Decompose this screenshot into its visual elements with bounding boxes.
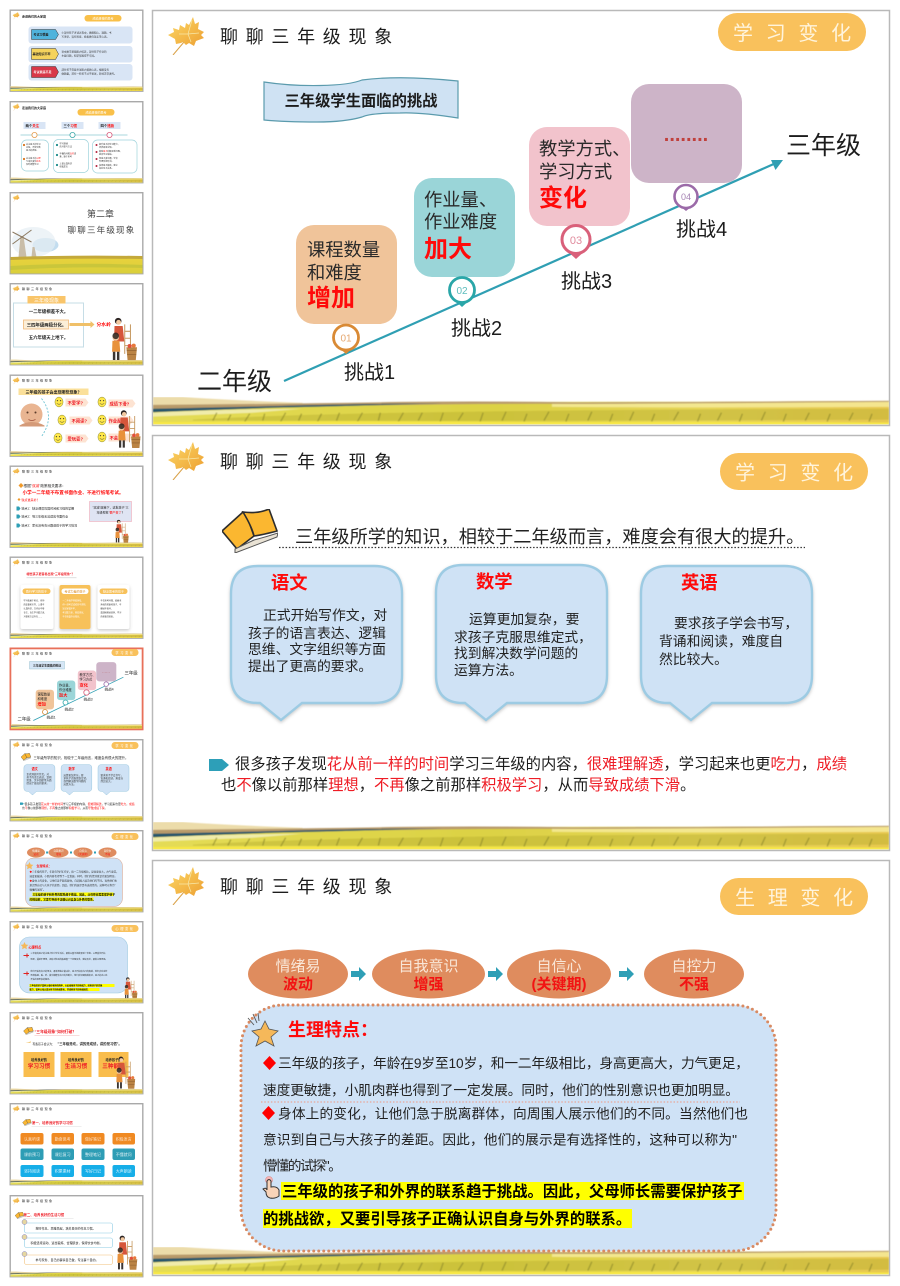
thumbnail 7: 哪些孩子容易出现三年级现象: 缺乏思考的孩子 [103, 588, 124, 594]
callout: 语文: 孩子的语言表达、逻辑 [248, 626, 386, 641]
thumbnail 9: 三年级所学的知识: 很多孩子发现花从前一样的时间学习三年级的内容，很难理解透，学习起来也更吃力，成绩 [24, 802, 135, 806]
thumbnail 10: 生理变化: 三年级的孩子和外界的联系趋于挑战。因此，父母师长需要保护孩子 [32, 892, 115, 896]
icon: pin 01 [334, 325, 358, 354]
thumbnail 12: 三年级现象如何打破: "三年级现象"如何打破？ [34, 1029, 76, 1034]
thumbnail 10: 生理变化: 自控力 [104, 848, 112, 852]
card: challenge 3: 变化 [539, 184, 587, 212]
thumbnail 1: 走进我们的大家庭: 考试习惯差 [34, 32, 49, 36]
thumbnail 2: 两个关注 三个习惯 四个措施: 教，勤于思考 [60, 154, 72, 158]
thumbnail 13: 第一 培养良好的学习习惯: 勤奋思考 [55, 1136, 71, 1142]
badge: 生理变化 [720, 878, 868, 915]
thumbnail 10: 生理变化: 自信心 [79, 848, 87, 852]
oval: 自我意识增强 [372, 950, 485, 998]
thumbnail 7: 哪些孩子容易出现三年级现象: 的积极性较差。 [100, 614, 115, 618]
arrow [619, 967, 634, 981]
thumbnail 11: 心理特点 [10, 922, 143, 1003]
thumbnail 9: 三年级所学的知识: 数学 [68, 766, 76, 771]
thumbnail 2: 两个关注 三个习惯 四个措施: 良好亲子关系。 [99, 166, 114, 170]
callout: 英语 [641, 566, 812, 720]
thumbnail 8: active slide 三年级学生面临的挑战: 挑战4 [104, 686, 114, 692]
oval: 自控力不强: 不强 [679, 976, 709, 993]
thumbnail 6: 双减政策: 缺点谁来补？ [22, 497, 40, 502]
thumbnail 13: 第一 培养良好的学习习惯: 积极发言 [116, 1136, 132, 1142]
thumbnail 4: 三年级现象: 聊聊三年级现象 [22, 286, 53, 291]
thumbnail 9: 三年级所学的知识: 三年级所学的知识，相较于二年级而言，难度会有很大的提升。 [34, 755, 128, 760]
thumbnail 13: 第一 培养良好的学习习惯: 积累素材 [55, 1168, 71, 1174]
thumbnail 10: 生理变化: 不强 [105, 852, 110, 856]
card: challenge 2: 作业难度 [424, 211, 497, 232]
thumbnail 13: 第一 培养良好的学习习惯: 认真听课 [24, 1136, 40, 1142]
text block: body characteristics: 速度更敏捷，小肌肉群也得到了一定发展。同时，他们的性别意识也更加明显。 [263, 1082, 739, 1098]
thumbnail 9: 三年级所学的知识: 背诵和阅读，难度自 [100, 776, 124, 780]
thumbnail 1: 走进我们的大家庭: 主要问题，知识掌握得不牢固。 [62, 54, 97, 58]
thumbnail 8: active slide 三年级学生面临的挑战: 三年级学生面临的挑战 [33, 664, 61, 668]
icon: maple leaf [168, 442, 204, 480]
thumbnail 2: 两个关注 三个习惯 四个措施: 上课认真听讲 [60, 162, 72, 166]
thumbnail 9: 三年级所学的知识: 运算方法。 [64, 782, 76, 786]
thumbnail 6: 双减政策: 缺点1：缺乏课后巩固时间和习得的掌握 [22, 506, 74, 511]
thumbnail 8: active slide 三年级学生面临的挑战: 作业难度 [59, 687, 73, 692]
thumbnail 1: 走进我们的大家庭: 部分孩子需要考试能力兼顾心态，根据没有 [62, 68, 110, 72]
thumbnail 2: 两个关注 三个习惯 四个措施: 两个关注 [26, 123, 40, 128]
thumbnail 10: 生理变化 [10, 831, 143, 912]
thumbnail 6: 双减政策: 缺点3：家长没有充分跟进孩子的学习情况 [22, 523, 77, 528]
thumbnail 8: active slide 三年级学生面临的挑战: 挑战2 [64, 706, 74, 712]
thumbnail 5: 三年级的孩子会出现哪些现象: 不阅读? [72, 418, 87, 424]
thumbnail 8: active slide 三年级学生面临的挑战: 教学方式、 [80, 672, 95, 677]
card: challenge 1: 课程数量 [307, 239, 380, 260]
icon: open book [222, 509, 278, 553]
thumbnail 11: 心理特点: 三年级的孩子的注意力和小学生活后，逐渐从童年期发展到少年期。心理变化开始 [30, 951, 105, 955]
thumbnail 9: 三年级所学的知识: 找到解决数学问题的 [64, 779, 87, 783]
thumbnail 4: 三年级现象: 三年级现象 [34, 297, 59, 304]
card: challenge 1 [296, 225, 397, 324]
label: 挑战1: 挑战1 [344, 361, 395, 384]
thumbnail 6: 双减政策: 缺点2：到三年级无法适应书面作业 [22, 514, 68, 519]
icon: pin 03: 03 [570, 235, 582, 247]
thumbnail 7: 哪些孩子容易出现三年级现象: 一二年级学得很轻松， [62, 598, 83, 602]
thumbnail 11: 心理特点: 聊聊三年级现象 [22, 924, 53, 929]
thumbnail 2: 两个关注 三个习惯 四个措施: 过程，不仅分数 [26, 145, 41, 149]
thumbnail 2: 两个关注 三个习惯 四个措施: 走进我们的大家庭 [22, 105, 46, 110]
label: 挑战4: 挑战4 [676, 218, 727, 241]
thumbnail 7: 哪些孩子容易出现三年级现象 [10, 557, 143, 638]
thumbnail 6: 双减政策 [10, 466, 143, 547]
thumbnail 2: 两个关注 三个习惯 四个措施: 的习惯与方法 [60, 144, 72, 148]
banner: 三年级学生面临的挑战: 三年级学生面临的挑战 [285, 92, 438, 110]
thumbnail 3: 第二章 聊聊三年级现象: 聊聊三年级现象 [68, 225, 135, 235]
card: challenge 3 [529, 127, 630, 226]
thumbnail 7: 哪些孩子容易出现三年级现象: 聊聊三年级现象 [22, 559, 53, 564]
oval: 自我意识增强: 增强 [413, 975, 444, 993]
thumbnail 2: 两个关注 三个习惯 四个措施: 关注孩子的学习 [26, 142, 41, 146]
label: 三年级: 三年级 [786, 132, 861, 160]
callout: 数学 [436, 565, 607, 720]
icon: maple leaf [168, 17, 204, 55]
thumbnail 7: 哪些孩子容易出现三年级现象: 不会检查作业题目。 [62, 614, 81, 618]
icon: pin 02: 02 [456, 286, 468, 297]
thumbnail 9: 三年级所学的知识: 要求孩子学会书写， [100, 773, 123, 777]
thumbnail 10: 生理变化: 懵懂的试探"。 [30, 888, 45, 892]
thumbnail 14: 第二 培养良好的生活习惯: 第二、培养良好的生活习惯 [24, 1212, 65, 1217]
card: challenge 4 [631, 84, 742, 183]
oval: 自控力不强: 自控力 [671, 958, 717, 975]
thumbnail 13: 第一 培养良好的学习习惯: 做好笔记 [85, 1136, 101, 1142]
card: challenge 2: 作业量、 [424, 189, 497, 210]
thumbnail 9: 三年级所学的知识: 语文 [32, 766, 39, 771]
thumbnail 14: 第二 培养良好的生活习惯: 聊聊三年级现象 [22, 1198, 53, 1203]
thumbnail 11: 心理特点: 能力，需要父母认真对孩子的情绪变化，并培养孩子的情绪调控。 [30, 987, 90, 991]
thumbnail 13: 第一 培养良好的学习习惯: 写好日记 [85, 1168, 101, 1174]
thumbnail 14: 第二 培养良好的生活习惯: 积极坚持运动、适当锻炼、合理膳食，保持饮食均衡。 [30, 1240, 103, 1245]
icon: pin 02 [450, 278, 474, 307]
thumbnail 14: 第二 培养良好的生活习惯: 参与家务、自己的事情自己做，专注事个目的。 [36, 1257, 99, 1262]
oval: 情绪易波动: 波动 [283, 975, 313, 993]
thumbnail 8: active slide 三年级学生面临的挑战 [10, 648, 143, 729]
thumbnail 2: 两个关注 三个习惯 四个措施: 不懂的问题 及时 请 [60, 152, 76, 156]
thumbnail 6: 双减政策: 小学一二年级不布置书面作业、不进行纸笔考试。 [22, 489, 124, 496]
thumbnail 1: 走进我们的大家庭: 考试素质不足 [34, 69, 52, 74]
text block: body characteristics: 三年级的孩子，年龄在9岁至10岁，和一二年级相比，身高更高大，力气更足， [278, 1055, 749, 1071]
thumbnail 2: 两个关注 三个习惯 四个措施: 和孩子多沟通，学会 [99, 156, 118, 160]
callout: 数学: 求孩子克服思维定式， [454, 630, 592, 645]
thumbnail 8: active slide 三年级学生面临的挑战: 挑战3 [84, 696, 93, 702]
thumbnail 6: 双减政策: "双减"政策下，这批孩子"三 [92, 504, 129, 510]
icon: maple leaf [168, 867, 204, 905]
card: challenge 2: 加大 [424, 236, 472, 263]
thumbnail 8: active slide 三年级学生面临的挑战: 二年级 [18, 716, 31, 722]
thumbnail 2: 两个关注 三个习惯 四个措施: 合理安排时间。 [99, 159, 114, 163]
thumbnail 12: 三年级现象如何打破: 三种能力 [102, 1062, 125, 1070]
oval: 自我意识增强: 自我意识 [398, 957, 459, 975]
thumbnail 10: 生理变化: 增强 [56, 852, 61, 856]
thumbnail 2: 两个关注 三个习惯 四个措施: 成绩滑坡的思考 [85, 110, 107, 114]
icon: star [248, 1013, 278, 1046]
thumbnail 11: 心理特点: 他们开始有自己的想法，逐渐想独立做决定，孩子开始有自己的情绪，他们会对这些 [30, 969, 107, 973]
thumbnail 8: active slide 三年级学生面临的挑战: 学习变化 [115, 650, 135, 655]
thumbnail 13: 第一 培养良好的学习习惯: 聊聊三年级现象 [22, 1106, 53, 1111]
thumbnail 8: active slide 三年级学生面临的挑战: …… [102, 668, 110, 674]
arrow: progress line from 二年级 to 三年级 [284, 160, 783, 381]
thumbnail 8: active slide 三年级学生面临的挑战: 加大 [59, 692, 68, 698]
panel: slide 3 生理变化 [152, 860, 890, 1276]
thumbnail 4: 三年级现象: 五六年级天上地下。 [29, 334, 68, 341]
thumbnail 5: 三年级的孩子会出现哪些现象: 聊聊三年级现象 [22, 377, 53, 382]
thumbnail 13: 第一 培养良好的学习习惯: 课前预习 [24, 1151, 40, 1157]
thumbnail 2: 两个关注 三个习惯 四个措施: 提高学习成绩。 [99, 152, 114, 156]
callout: 英语: 背诵和阅读，难度自 [659, 634, 783, 649]
thumbnail 12: 三年级现象如何打破: 有些孩子会认为： [32, 1042, 55, 1046]
thumbnail 12: 三年级现象如何打破 [10, 1013, 143, 1094]
thumbnail 5: 三年级的孩子会出现哪些现象: 三年级的孩子会出现哪些现象？ [26, 388, 82, 394]
thumbnail 5: 三年级的孩子会出现哪些现象: 爱玩耍? [68, 436, 83, 442]
thumbnail 7: 哪些孩子容易出现三年级现象: 哪些孩子更容易出现"三年级现象"？ [26, 571, 74, 576]
thumbnail 12: 三年级现象如何打破: 培养孩子的 [106, 1057, 121, 1062]
thumbnail 2: 两个关注 三个习惯 四个措施: 提升孩子的学习能力， [99, 142, 120, 146]
thumbnail 7: 哪些孩子容易出现三年级现象: 教行学习的孩子 [26, 588, 47, 594]
thumbnail 6: 双减政策: 年级现象"要产变了？ [96, 510, 125, 514]
thumbnail 10: 生理变化: ◆身体上的变化，让他们急于脱离群体，向周围人展示他们的不同。当然他们也 [30, 878, 118, 882]
badge: 学习变化: 学习变化 [733, 22, 864, 45]
label: 挑战2: 挑战2 [451, 317, 502, 340]
thumbnail 2: 两个关注 三个习惯 四个措施: 关注孩子的 心理 [26, 156, 41, 160]
thumbnail 13: 第一 培养良好的学习习惯: 整理笔记 [85, 1151, 101, 1157]
thumbnail 9: 三年级所学的知识: 求孩子克服思维定式， [64, 776, 89, 780]
thumbnail 13: 第一 培养良好的学习习惯: 不懂就问 [116, 1151, 132, 1157]
thumbnail 8: active slide 三年级学生面临的挑战: 聊聊三年级现象 [22, 650, 53, 655]
thumbnail 4: 三年级现象: 三四年级两极分化。 [27, 322, 66, 328]
thumbnail 2: 两个关注 三个习惯 四个措施: 积极发言 [60, 164, 68, 168]
thumbnail 7: 哪些孩子容易出现三年级现象: 不会思考问题，依赖老 [100, 598, 121, 602]
callout: 数学: 找到解决数学问题的 [454, 646, 578, 661]
heading: 聊聊三年级现象: 聊聊三年级现象 [220, 27, 400, 47]
callout: 英语: 要求孩子学会书写， [674, 616, 798, 631]
thumbnail 1: 走进我们的大家庭: 成绩滑坡的思考 [92, 16, 114, 20]
callout: 语文 [231, 566, 402, 720]
thumbnail 9: 三年级所学的知识: 聊聊三年级现象 [22, 742, 53, 747]
icon: pointing hand [263, 1176, 279, 1198]
thumbnail 8: active slide 三年级学生面临的挑战: 变化 [80, 682, 89, 688]
thumbnail 10: 生理变化: 自我意识 [53, 848, 64, 852]
thumbnail 10: 生理变化: 生理变化 [115, 834, 135, 839]
thumbnail 1: 走进我们的大家庭: 写潦草、没有检查、抢着做完就走等心态。 [62, 34, 109, 38]
thumbnail 7: 哪些孩子容易出现三年级现象: 习惯和方法存在…… [24, 614, 42, 618]
thumbnail 2: 两个关注 三个习惯 四个措施: 多给孩子鼓励，建立 [99, 163, 118, 167]
callout: 数学: 数学 [476, 571, 513, 592]
thumbnail 10: 生理变化: ◆三年级的孩子，年龄在9岁至10岁，和一二年级相比，身高更高大，力气更足， [30, 870, 119, 874]
panel: slide 1 三年级学生面临的挑战 [152, 10, 890, 426]
thumbnail 1: 走进我们的大家庭: 小部分孩子考试过程中，做题粗心、漏题、书 [62, 30, 112, 34]
thumbnail 14: 第二 培养良好的生活习惯: 按时作息、早睡早起，培养良好的作息习惯。 [36, 1226, 96, 1230]
thumbnail 13: 第一 培养良好的学习习惯: 课后复习 [55, 1151, 71, 1157]
thumbnail 8: active slide 三年级学生面临的挑战: 课程数量 [38, 692, 51, 696]
thumbnail 5: 三年级的孩子会出现哪些现象 [10, 375, 143, 456]
text block: conclusion [221, 756, 847, 794]
text block: body characteristics [261, 1055, 749, 1174]
thumbnail 7: 哪些孩子容易出现三年级现象: 懂就不爱问， [100, 606, 113, 610]
thumbnail 9: 三年级所学的知识: 思维、文字组织等方面 [26, 778, 52, 782]
thumbnail 2: 两个关注 三个习惯 四个措施: 学习规律 [60, 142, 68, 146]
thumbnail 9: 三年级所学的知识: 运算更加复杂，要 [64, 773, 84, 777]
thumbnail 7: 哪些孩子容易出现三年级现象: 师给的答案和孩子，不 [100, 602, 121, 606]
thumbnail 12: 三年级现象如何打破: 培养良好的 [31, 1057, 47, 1062]
badge: 生理变化: 生理变化 [735, 886, 866, 910]
callout: 数学: 运算方法。 [454, 663, 523, 678]
text block: body characteristics: 懵懂的试探"。 [263, 1158, 342, 1174]
thumbnail 5: 三年级的孩子会出现哪些现象: 作业乱写? [108, 418, 129, 424]
thumbnail 2: 两个关注 三个习惯 四个措施: 鼓励 孩子 积极思考问题， [99, 149, 122, 153]
thumbnail 10: 生理变化: 生理特点： [36, 863, 52, 868]
thumbnail 12: 三年级现象如何打破: "三年级是坎，讲的是成绩，讲的是习惯"。 [58, 1041, 122, 1046]
decorative grass band [153, 822, 889, 850]
banner: 三年级学生面临的挑战 [264, 78, 458, 122]
thumbnail 6: 双减政策: 根据"双减"政策相关要求： [24, 483, 66, 488]
thumbnail 12: 三年级现象如何打破: 生活习惯 [65, 1062, 88, 1070]
thumbnail 3: 第二章 聊聊三年级现象: 第二章 [87, 208, 114, 219]
thumbnail 7: 哪些孩子容易出现三年级现象: 考试能力差，容易慌张， [62, 610, 85, 614]
oval: 自信心关键期: 自信心 [536, 958, 582, 975]
thumbnail 10: 生理变化: 波动 [33, 852, 39, 856]
icon: pin 04: 04 [681, 192, 691, 202]
text block: body characteristics: 身体上的变化，让他们急于脱离群体，向周围人展示他们的不同。当然他们也 [278, 1106, 748, 1122]
card: challenge 3: 教学方式、 [539, 138, 630, 159]
label: 二年级: 二年级 [197, 368, 272, 396]
oval: 自控力不强 [644, 950, 744, 998]
thumbnail 5: 三年级的孩子会出现哪些现象: 不会写? [110, 434, 125, 442]
icon: pin 01: 01 [340, 334, 352, 344]
thumbnail 10: 生理变化: 聊聊三年级现象 [22, 833, 53, 838]
badge: 学习变化: 学习变化 [735, 462, 866, 484]
thumbnail 2: 两个关注 三个习惯 四个措施: 与成长变化 状态 [26, 159, 41, 163]
thumbnail 7: 哪些孩子容易出现三年级现象: 知识掌握不牢， [62, 606, 77, 610]
thumbnail 4: 三年级现象 [10, 284, 143, 365]
thumbnail 12: 三年级现象如何打破: 培养良好的 [68, 1057, 84, 1062]
oval: 自信心关键期 [507, 950, 611, 998]
callout: 语文: 思维、文字组织等方面 [248, 641, 386, 657]
thumbnail 9: 三年级所学的知识: 正式开始写作文，对 [26, 772, 50, 776]
thumbnail 12: 三年级现象如何打破: 聊聊三年级现象 [22, 1015, 53, 1020]
thumbnail 7: 哪些孩子容易出现三年级现象: 遇到困难就放弃，学习 [100, 610, 121, 614]
text block: conclusion: 很多孩子发现花从前一样的时间学习三年级的内容，很难理解透，学习起来也更吃力，成绩 [235, 756, 847, 773]
badge: 学习变化 [718, 13, 866, 51]
thumbnail 11: 心理特点: 三年级的孩子需要父母和老师的陪伴，以此增强孩子的情绪力，培养孩子的抗挫 [30, 983, 103, 987]
callout: 英语: 英语 [681, 572, 718, 593]
card: challenge 4: ........ [664, 124, 708, 146]
thumbnail 1: 走进我们的大家庭: 基础知识不牢 [32, 51, 51, 56]
callout: 语文: 提出了更高的要求。 [248, 658, 372, 674]
decorative grass band [153, 397, 889, 424]
decorative grass band [153, 1247, 889, 1274]
thumbnail 11: 心理特点: 心理特点 [28, 944, 42, 950]
text block: conclusion: 也不像以前那样理想，不再像之前那样积极学习，从而导致成绩下滑。 [221, 777, 695, 794]
thumbnail 13: 第一 培养良好的学习习惯: 大声朗读 [116, 1168, 132, 1174]
thumbnail 8: active slide 三年级学生面临的挑战: 学习方式 [80, 676, 93, 682]
headline sentence: 三年级所学的知识，相较于二年级而言，难度会有很大的提升。 [295, 527, 804, 547]
callout: 英语: 然比较大。 [659, 651, 728, 667]
thumbnail 1: 走进我们的大家庭: 走进我们的大家庭 [22, 13, 46, 18]
thumbnail 8: active slide 三年级学生面临的挑战: 挑战1 [46, 714, 56, 720]
thumbnail 5: 三年级的孩子会出现哪些现象: 成绩下滑? [110, 400, 130, 408]
text block: body characteristics: 意识到自己与大孩子的差距。因此，他们的展示是有选择性的，这种可以称为" [263, 1132, 737, 1148]
oval: 情绪易波动 [248, 950, 348, 998]
thumbnail 2: 两个关注 三个习惯 四个措施: 及时调整学习 [26, 162, 38, 166]
badge: 学习变化 [720, 453, 868, 490]
icon: pin 04 [674, 185, 698, 211]
thumbnail 7: 哪些孩子容易出现三年级现象: 学习依赖于家长、老师 [24, 598, 44, 602]
thumbnail 2: 两个关注 三个习惯 四个措施: 孩子的表现。 [26, 148, 38, 152]
callout: yellow highlight text: 三年级的孩子和外界的联系趋于挑战。因此，父母师长需要保护孩子 [282, 1182, 742, 1200]
thumbnail 7: 哪些孩子容易出现三年级现象: 但一到考试成绩却不理想， [62, 602, 87, 606]
thumbnail 7: 哪些孩子容易出现三年级现象: 认真听讲，写作业不够 [24, 606, 44, 610]
thumbnail 8: active slide 三年级学生面临的挑战: 增加 [38, 700, 46, 708]
thumbnail 14: 第二 培养良好的生活习惯 [10, 1196, 143, 1277]
thumbnail 9: 三年级所学的知识: 也不像以前那样理想，不再像之前那样积极学习，从而导致成绩下滑。 [22, 806, 107, 810]
thumbnail 2: 两个关注 三个习惯 四个措施: 四个措施 [100, 123, 115, 128]
thumbnail 8: active slide 三年级学生面临的挑战: 三年级 [124, 670, 138, 676]
oval: 自信心关键期: (关键期) [532, 975, 586, 993]
thumbnail 2: 两个关注 三个习惯 四个措施: 三个习惯 [64, 123, 78, 128]
card: challenge 1: 增加 [307, 285, 355, 312]
icon: teal tag [209, 759, 229, 771]
thumbnail 4: 三年级现象: 一二年级相差不大。 [29, 308, 68, 315]
thumbnail 10: 生理变化: 速度更敏捷，小肌肉群也得到了一定发展。同时，他们的性别意识也更加明显。 [30, 874, 117, 878]
arrow [488, 967, 503, 981]
callout: 语文: 正式开始写作文，对 [263, 608, 387, 623]
thumbnail 10: 生理变化: 意识到自己与大孩子的差距。因此，他们的展示是有选择性的，这种可以称为" [30, 883, 116, 887]
thumbnail 2: 两个关注 三个习惯 四个措施 [10, 102, 143, 183]
panel: 生理特点 [241, 1005, 776, 1251]
thumbnail 11: 心理特点: 更加敏感，看、听、做中都能有自己的判断力，他们会加强情绪波动，孩子的内心也 [30, 973, 107, 977]
thumbnail 3: 第二章 聊聊三年级现象 [10, 193, 143, 274]
thumbnail strip [10, 10, 143, 1277]
thumbnail 8: active slide 三年级学生面临的挑战: 和难度 [38, 696, 48, 701]
thumbnail 10: 生理变化: 情绪易 [32, 848, 40, 852]
thumbnail 11: 心理特点: 心理变化 [115, 926, 135, 931]
thumbnail 13: 第一 培养良好的学习习惯: 坚持阅读 [24, 1168, 40, 1174]
thumbnail 6: 双减政策: 聊聊三年级现象 [22, 468, 53, 473]
thumbnail 11: 心理特点: 明显，遇到不理想，还有对性别的敏感度一个问题及求，建议及求，逐渐主观更强。 [30, 957, 107, 961]
label: 挑战3: 挑战3 [561, 270, 612, 293]
heading: 生理特点: 生理特点： [288, 1020, 378, 1040]
callout: 语文: 语文 [271, 572, 308, 593]
thumbnail 8: active slide 三年级学生面临的挑战: 作业量、 [59, 682, 72, 688]
thumbnail 7: 哪些孩子容易出现三年级现象: 专注，自主学习能力差， [24, 610, 46, 614]
thumbnail 1: 走进我们的大家庭: 做题量，还有一些孩子过于紧张，影响正常发挥。 [62, 72, 117, 76]
thumbnail 9: 三年级所学的知识 [10, 740, 143, 821]
thumbnail 9: 三年级所学的知识: 学习变化 [115, 743, 135, 748]
thumbnail 5: 三年级的孩子会出现哪些现象: 不爱学? [68, 400, 83, 406]
heading: 聊聊三年级现象: 聊聊三年级现象 [220, 877, 400, 897]
thumbnail 9: 三年级所学的知识: 然比较大。 [100, 779, 113, 783]
arrow [351, 967, 366, 981]
oval: 情绪易波动: 情绪易 [275, 958, 321, 975]
thumbnail 9: 三年级所学的知识: 提出了更高的要求。 [26, 781, 49, 785]
panel: slide 2 学习变化 [152, 436, 890, 850]
thumbnail 1: 走进我们的大家庭: 语文数学基础能力较差，部分孩子作业的 [62, 50, 107, 54]
heading: 聊聊三年级现象: 聊聊三年级现象 [220, 452, 400, 472]
card: challenge 2 [414, 178, 515, 277]
thumbnail 1: 走进我们的大家庭 [10, 10, 143, 91]
thumbnail 9: 三年级所学的知识: 孩子的语言表达、逻辑 [26, 775, 52, 779]
thumbnail 11: 心理特点: 开始出现更多的疑问。 [30, 977, 51, 981]
thumbnail 10: 生理变化: 的挑战欲，又要引导孩子正确认识自身与外界的联系。 [30, 897, 96, 901]
icon: pin 03 [562, 226, 590, 259]
thumbnail 7: 哪些孩子容易出现三年级现象: 的监督和引导，上课不 [24, 602, 44, 606]
thumbnail 10: 生理变化: (关键期) [78, 852, 88, 856]
thumbnail 4: 三年级现象: 分水岭 [96, 321, 111, 328]
callout: 数学: 运算更加复杂，要 [469, 611, 580, 627]
callout: yellow highlight text: 的挑战欲，又要引导孩子正确认识自身与外界的联系。 [263, 1209, 631, 1228]
thumbnail 9: 三年级所学的知识: 英语 [106, 766, 113, 771]
thumbnail 13: 第一 培养良好的学习习惯 [10, 1104, 143, 1185]
thumbnail 2: 两个关注 三个习惯 四个措施: 培养阅读习惯。 [99, 145, 114, 149]
thumbnail 7: 哪些孩子容易出现三年级现象: 考试力差的孩子 [64, 588, 86, 594]
card: challenge 1: 和难度 [307, 262, 362, 283]
card: challenge 3: 学习方式 [539, 161, 612, 182]
thumbnail 13: 第一 培养良好的学习习惯: 第一、培养良好的学习习惯 [32, 1120, 73, 1125]
thumbnail 12: 三年级现象如何打破: 学习习惯 [28, 1062, 51, 1070]
callout: yellow highlight text [263, 1182, 744, 1228]
